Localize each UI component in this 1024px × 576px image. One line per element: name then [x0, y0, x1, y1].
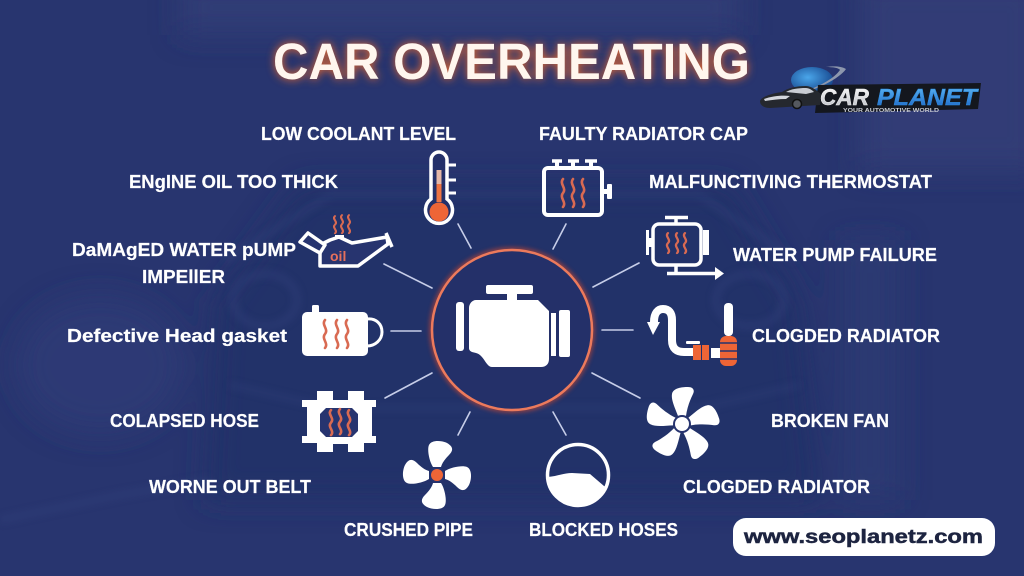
website pill: [733, 518, 995, 556]
website url: www.seoplanetz.com: [743, 527, 983, 548]
label: defective head gasket: Defective Head gasket: [67, 326, 287, 346]
logo globe: [791, 66, 846, 95]
icon: coolant mug: [302, 305, 382, 356]
label: worn out belt: WORNE OUT BELT: [149, 477, 311, 497]
label: impeller line: IMPEllER: [142, 267, 225, 287]
ring glow: [432, 250, 592, 410]
label: blocked hoses: BLOCKED HOSES: [529, 520, 678, 540]
logo wordmark car: CAR: [820, 84, 869, 110]
label: damaged water pump impeller: DaMAgED WATER pUMP: [72, 240, 296, 260]
label: water pump failure: WATER PUMP FAILURE: [733, 245, 937, 265]
label: collapsed hose: COLAPSED HOSE: [110, 411, 259, 431]
engine: [456, 285, 570, 367]
icon: radiator pipes: [647, 303, 737, 366]
icon: radiator cap engine: [544, 161, 612, 215]
icon: water pump with arrow: [646, 218, 724, 280]
icon: gauge: [548, 444, 608, 506]
icon: five blade fan: [644, 387, 721, 461]
logo tagline: YOUR AUTOMOTIVE WORLD: [843, 108, 939, 114]
label: clogged radiator lower: CLOGDED RADIATOR: [683, 477, 870, 497]
logo car: [760, 86, 821, 108]
orange ring: [432, 250, 592, 410]
logo: Car Planet: [760, 66, 981, 114]
central engine icon in ring: [432, 250, 592, 410]
label: clogged radiator right: CLOGDED RADIATOR: [752, 326, 940, 346]
icon: fan with orange hub: [403, 441, 471, 509]
icon: oil can: [300, 215, 392, 266]
connector lines: [384, 224, 640, 435]
title glow: CAR OVERHEATING: [273, 33, 750, 90]
logo banner: [815, 83, 981, 113]
title text: CAR OVERHEATING: [273, 33, 750, 90]
label: faulty radiator cap: FAULTY RADIATOR CAP: [539, 124, 748, 144]
label: engine oil too thick: ENgINE OIL TOO THICK: [129, 172, 338, 192]
icon: thermometer: [425, 152, 456, 223]
oil label: oil: [330, 248, 346, 264]
icon: hose block with steam: [302, 391, 376, 452]
cause labels: [67, 124, 940, 540]
logo wordmark planet: PLANET: [877, 84, 979, 110]
label: low coolant level: LOW COOLANT LEVEL: [261, 124, 456, 144]
label: malfunctioning thermostat: MALFUNCTIVING THERMOSTAT: [649, 172, 932, 192]
label: broken fan: BROKEN FAN: [771, 411, 889, 431]
label: crushed pipe: CRUSHED PIPE: [344, 520, 473, 540]
